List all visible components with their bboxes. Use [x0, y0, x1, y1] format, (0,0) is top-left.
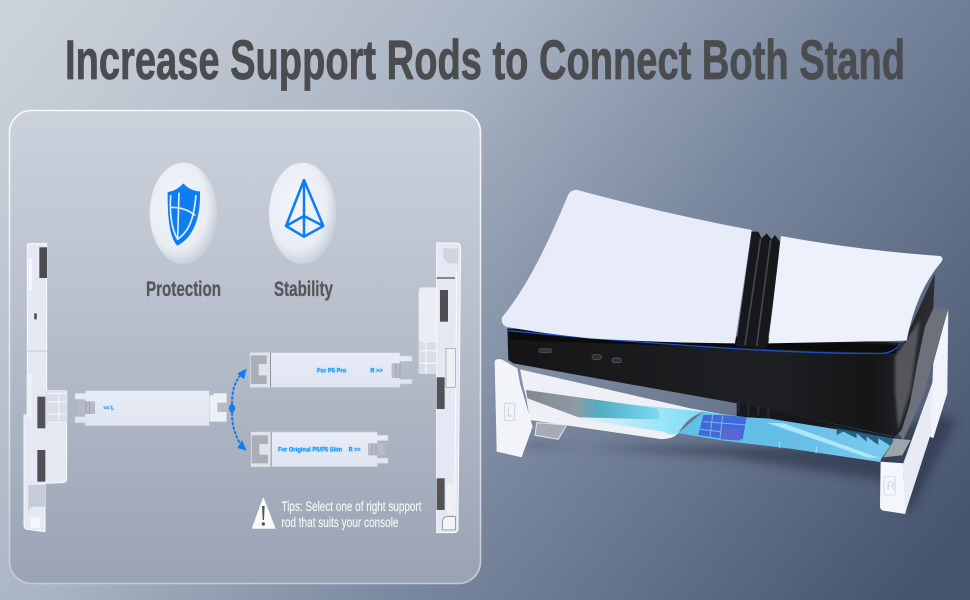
support rod: For PS Pro: For P5 Pro	[317, 367, 346, 374]
support rod L	[75, 391, 227, 426]
tips text: Tips: Select one of right support	[282, 499, 422, 514]
body highlight	[895, 320, 920, 430]
glass support section	[678, 412, 895, 462]
stand: foot	[535, 423, 567, 439]
support rod: For PS Pro: R >>	[370, 367, 383, 374]
stand: far side wall	[930, 309, 948, 438]
label: Protection: Protection	[146, 278, 221, 301]
right stand	[419, 243, 461, 533]
ports	[539, 349, 552, 353]
icon: protection shield	[150, 163, 217, 264]
support rod: For Original P5/P5 Slim: R >>	[349, 447, 361, 454]
left stand with L support rod	[24, 243, 227, 532]
console on stand	[495, 190, 957, 514]
arrow: selection arc to the two right rods	[229, 369, 247, 451]
support rod L: << L	[103, 405, 115, 411]
panel: support rods diagram	[10, 110, 480, 584]
right stand leg	[903, 380, 933, 514]
icon: stability pyramid	[269, 163, 336, 264]
support rod: For Original P5/P5 Slim: For Original P5/P5 Slim	[278, 447, 342, 454]
support rod: For PS Pro	[250, 353, 412, 387]
sawtooth vents	[823, 425, 893, 447]
stand right teeth	[883, 439, 911, 457]
white left cover	[502, 190, 752, 343]
circuit chips	[698, 415, 747, 439]
left stand leg	[495, 359, 533, 457]
dark vents	[737, 403, 895, 443]
console body	[507, 273, 935, 437]
tips text	[282, 499, 422, 530]
console on stand: R	[887, 479, 896, 493]
shadow	[503, 413, 957, 513]
blue light line	[508, 331, 901, 353]
bright glass strip	[767, 423, 880, 458]
label: Stability: Stability	[274, 278, 333, 301]
white rod	[520, 369, 732, 439]
white right cover	[768, 236, 942, 343]
black fins	[736, 232, 780, 348]
icon: warning triangle	[252, 498, 275, 528]
support rod: For Original P5/P5 Slim	[251, 432, 388, 467]
tips text: rod that suits your console	[282, 515, 398, 530]
